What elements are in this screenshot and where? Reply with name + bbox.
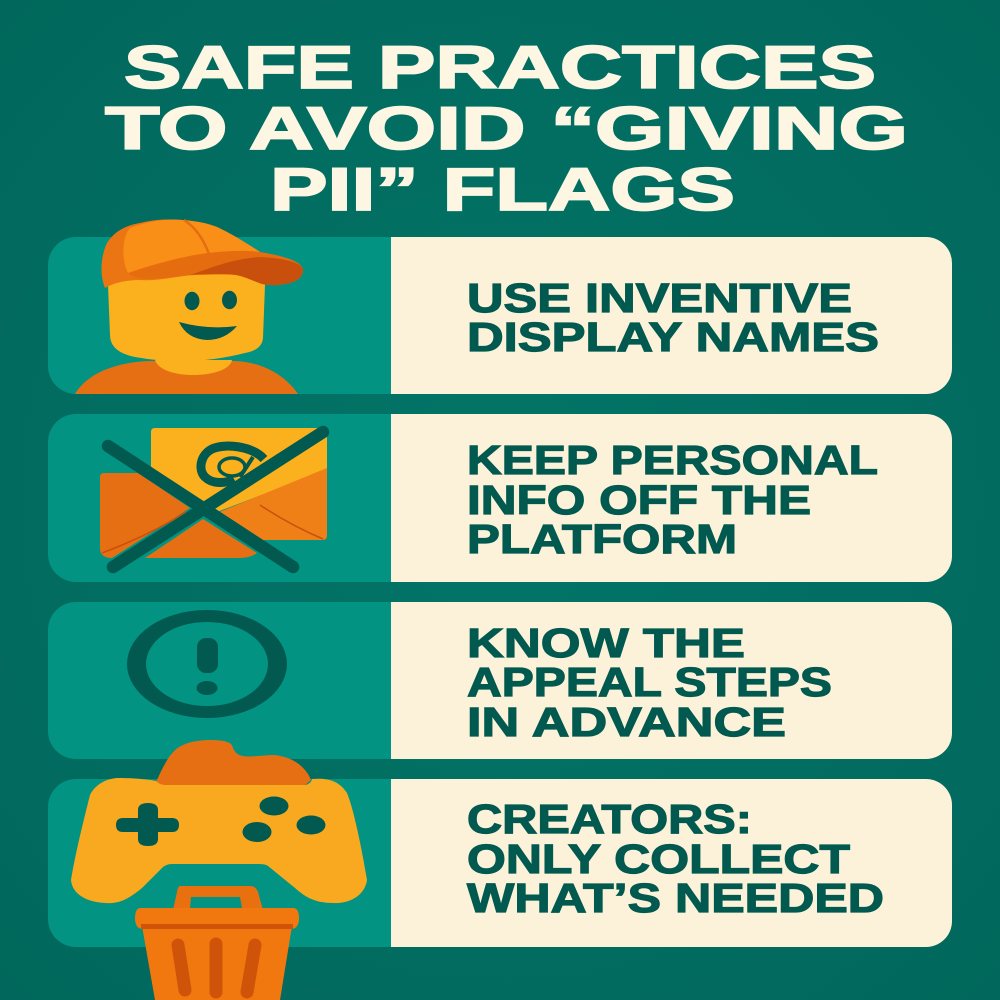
panel: keep personal info off the platform	[48, 414, 952, 582]
heading: display names: DISPLAY NAMES	[467, 314, 879, 360]
heading: personal info: INFO OFF THE	[467, 477, 811, 523]
icon: at sign	[201, 446, 264, 483]
heading: appeal steps: KNOW THE	[467, 620, 745, 666]
panel: know the appeal steps	[48, 602, 952, 759]
title: SAFE PRACTICES	[124, 34, 876, 101]
icon: game controller	[71, 740, 367, 903]
title: PII” FLAGS	[270, 156, 735, 223]
heading: creators	[467, 796, 884, 921]
heading: creators: ONLY COLLECT	[467, 836, 850, 882]
heading: display names	[467, 275, 879, 360]
icon: toy figure with cap	[75, 219, 303, 394]
icon: crossed-out email envelope	[100, 428, 327, 567]
title: TO AVOID “GIVING	[105, 95, 908, 162]
heading: creators: CREATORS:	[467, 796, 752, 842]
heading: personal info: PLATFORM	[467, 516, 737, 562]
heading: personal info: KEEP PERSONAL	[467, 437, 878, 483]
heading: display names: USE INVENTIVE	[467, 275, 852, 321]
icon: trash can	[135, 886, 299, 1000]
heading: creators: WHAT’S NEEDED	[467, 875, 884, 921]
heading: appeal steps: APPEAL STEPS	[467, 659, 832, 705]
panel: creators only collect what's needed	[48, 779, 952, 947]
icon: alert exclamation	[127, 610, 287, 718]
panel: use inventive display names	[48, 237, 952, 394]
heading: appeal steps: IN ADVANCE	[467, 699, 786, 745]
heading: appeal steps	[467, 620, 832, 745]
heading: personal info	[467, 437, 878, 562]
title	[105, 34, 908, 223]
